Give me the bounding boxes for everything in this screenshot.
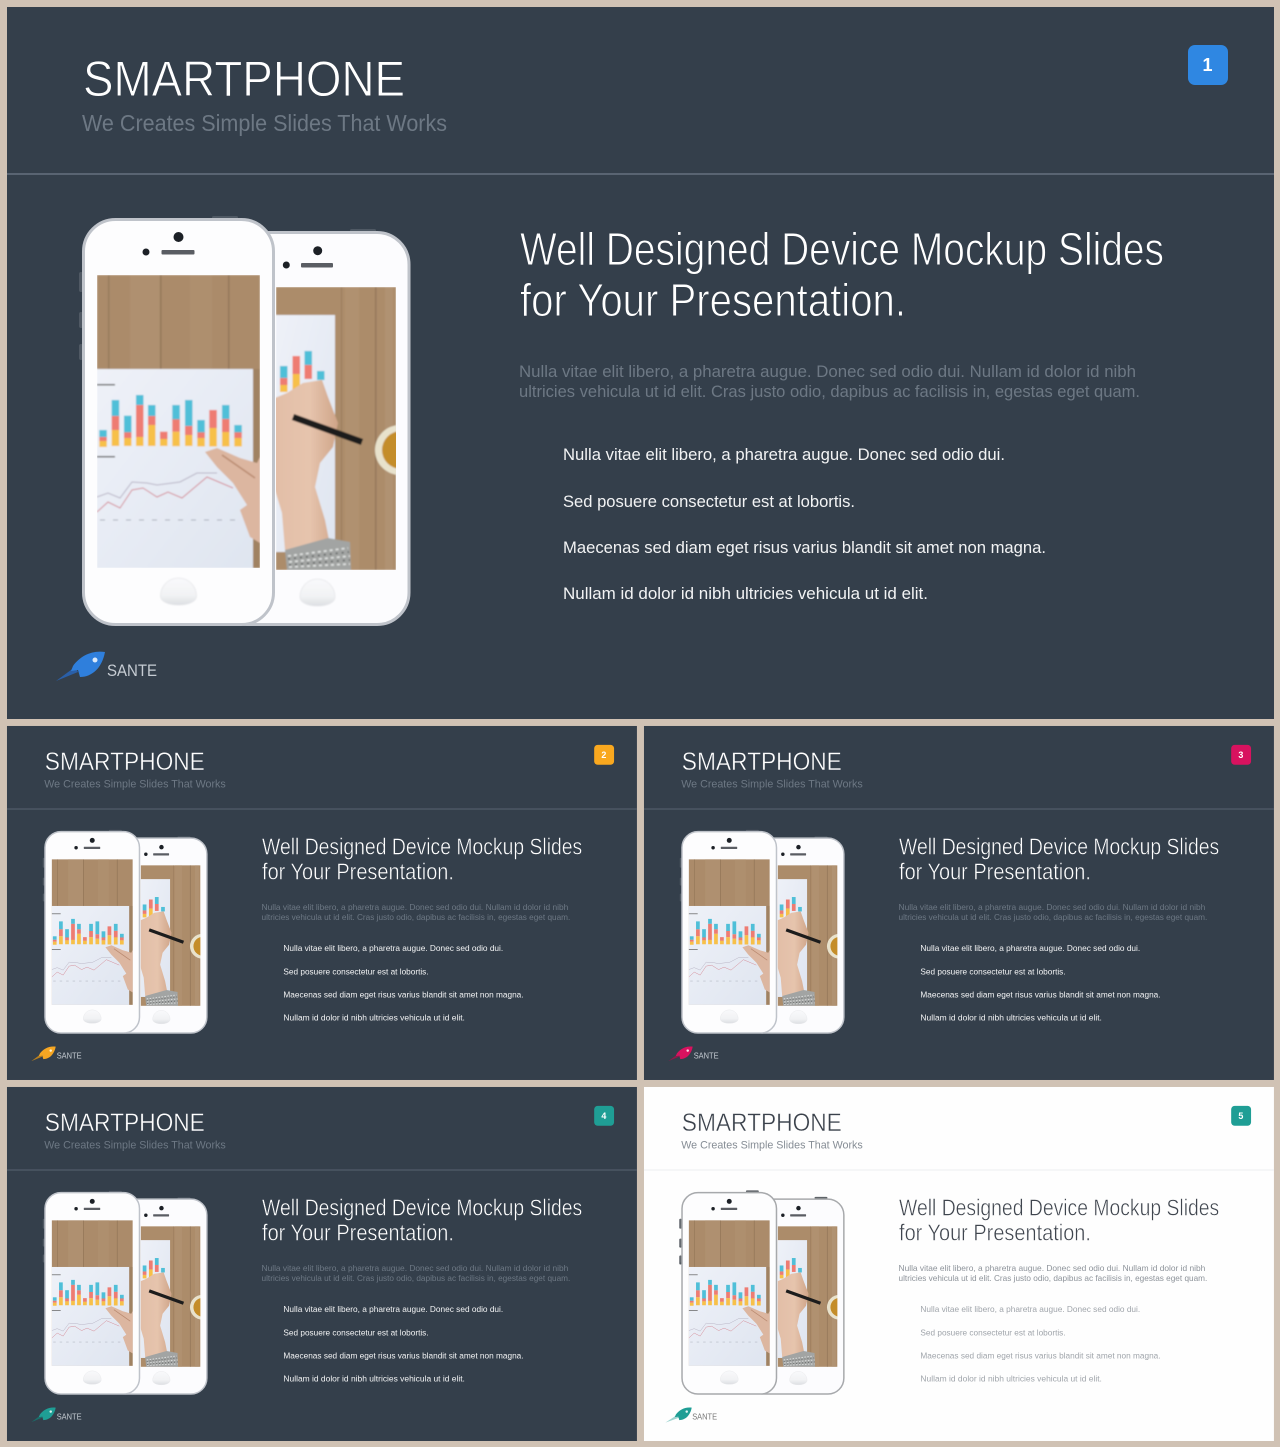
headline [262,833,582,885]
list of statements [920,1304,1161,1383]
page badge 4: 4 [601,1111,606,1121]
headline: for Your Presentation. [899,1220,1091,1246]
description paragraph: Nulla vitae elit libero, a pharetra augue. Donec sed odio dui. Nullam id dolor id nibh [519,362,1136,381]
description paragraph: Nulla vitae elit libero, a pharetra augue. Donec sed odio dui. Nullam id dolor id nibh [262,1263,569,1273]
headline [899,833,1219,885]
list of statements: Sed posuere consectetur est at lobortis. [563,492,855,511]
title: SMARTPHONE [682,1109,842,1137]
logo: rocket and SANTE: SANTE [57,1412,82,1422]
description paragraph: ultricies vehicula ut id elit. Cras justo odio, dapibus ac facilisis in, egestas eget quam. [262,1273,570,1283]
description paragraph [519,362,1140,401]
slide 1: main dark slide [7,7,1274,719]
title: SMARTPHONE [45,1109,205,1137]
list of statements: Maecenas sed diam eget risus varius blandit sit amet non magna. [920,1350,1161,1360]
page badge 2 [594,745,614,765]
logo: rocket and SANTE [665,1407,717,1423]
description paragraph: ultricies vehicula ut id elit. Cras justo odio, dapibus ac facilisis in, egestas eget quam. [899,1273,1207,1283]
subtitle: We Creates Simple Slides That Works [681,779,863,791]
page badge 3 [1231,745,1251,765]
logo: rocket and SANTE [31,1046,82,1061]
list of statements: Maecenas sed diam eget risus varius blandit sit amet non magna. [283,1350,524,1360]
subtitle: We Creates Simple Slides That Works [681,1140,863,1152]
logo: rocket and SANTE: SANTE [57,1051,82,1061]
list of statements: Nulla vitae elit libero, a pharetra augue. Donec sed odio dui. [920,943,1140,953]
headline: Well Designed Device Mockup Slides [262,833,582,859]
headline: for Your Presentation. [262,1220,454,1246]
list of statements: Maecenas sed diam eget risus varius blandit sit amet non magna. [920,989,1161,999]
page badge 2: 2 [601,750,606,760]
page badge 4 [594,1106,614,1126]
page badge 3: 3 [1238,750,1243,760]
headline [899,1194,1219,1246]
list of statements [283,1304,524,1383]
page badge 1 [1188,45,1228,85]
subtitle: We Creates Simple Slides That Works [44,779,226,791]
description paragraph: Nulla vitae elit libero, a pharetra augue. Donec sed odio dui. Nullam id dolor id nibh [899,902,1206,912]
description paragraph: ultricies vehicula ut id elit. Cras justo odio, dapibus ac facilisis in, egestas eget quam. [262,912,570,922]
description paragraph [899,902,1207,922]
slide 5: white with teal accent [644,1087,1274,1441]
description paragraph [262,902,570,922]
headline: for Your Presentation. [520,274,906,326]
slide 3: dark with crimson accent [644,726,1274,1080]
list of statements: Sed posuere consectetur est at lobortis. [920,1328,1066,1338]
description paragraph [262,1263,570,1283]
headline: Well Designed Device Mockup Slides [520,223,1164,275]
list of statements: Sed posuere consectetur est at lobortis. [920,967,1066,977]
list of statements: Nulla vitae elit libero, a pharetra augue. Donec sed odio dui. [563,445,1005,464]
page badge 5 [1231,1106,1251,1126]
slide 2: dark with orange accent [7,726,637,1080]
logo: rocket and SANTE: SANTE [692,1412,717,1422]
headline: Well Designed Device Mockup Slides [899,1194,1219,1220]
list of statements: Sed posuere consectetur est at lobortis. [283,967,429,977]
headline [520,223,1164,326]
side buttons [679,1190,827,1264]
headline: for Your Presentation. [899,859,1091,885]
phone mockups [680,1191,852,1394]
list of statements: Sed posuere consectetur est at lobortis. [283,1328,429,1338]
logo: rocket and SANTE: SANTE [107,661,157,680]
logo: rocket and SANTE [56,652,157,681]
logo: rocket and SANTE [31,1407,82,1422]
description paragraph: Nulla vitae elit libero, a pharetra augue. Donec sed odio dui. Nullam id dolor id nibh [899,1263,1206,1273]
list of statements: Nulla vitae elit libero, a pharetra augue. Donec sed odio dui. [283,943,503,953]
list of statements: Nulla vitae elit libero, a pharetra augue. Donec sed odio dui. [283,1304,503,1314]
list of statements: Nullam id dolor id nibh ultricies vehicula ut id elit. [283,1012,465,1022]
list of statements: Nulla vitae elit libero, a pharetra augue. Donec sed odio dui. [920,1304,1140,1314]
subtitle: We Creates Simple Slides That Works [82,110,447,136]
title: SMARTPHONE [682,748,842,776]
list of statements: Nullam id dolor id nibh ultricies vehicula ut id elit. [920,1012,1102,1022]
phone mockups [43,830,215,1033]
phone mockups [43,1191,215,1394]
list of statements [283,943,524,1022]
description paragraph: ultricies vehicula ut id elit. Cras justo odio, dapibus ac facilisis in, egestas eget quam. [899,912,1207,922]
description paragraph: ultricies vehicula ut id elit. Cras justo odio, dapibus ac facilisis in, egestas eget quam. [519,382,1140,401]
subtitle: We Creates Simple Slides That Works [44,1140,226,1152]
list of statements: Nullam id dolor id nibh ultricies vehicula ut id elit. [563,584,928,603]
headline: Well Designed Device Mockup Slides [262,1194,582,1220]
page badge 1: 1 [1202,55,1213,75]
headline: for Your Presentation. [262,859,454,885]
logo: rocket and SANTE: SANTE [694,1051,719,1061]
list of statements: Maecenas sed diam eget risus varius blandit sit amet non magna. [563,538,1046,557]
description paragraph: Nulla vitae elit libero, a pharetra augue. Donec sed odio dui. Nullam id dolor id nibh [262,902,569,912]
page badge 5: 5 [1238,1111,1243,1121]
list of statements [920,943,1161,1022]
logo: rocket and SANTE [668,1046,719,1061]
description paragraph [899,1263,1207,1283]
title: SMARTPHONE [83,51,405,107]
headline [262,1194,582,1246]
phone mockups [680,830,852,1033]
headline: Well Designed Device Mockup Slides [899,833,1219,859]
list of statements: Maecenas sed diam eget risus varius blandit sit amet non magna. [283,989,524,999]
phone mockups [79,216,425,624]
list of statements: Nullam id dolor id nibh ultricies vehicula ut id elit. [920,1373,1102,1383]
list of statements [563,445,1046,603]
slide 4: dark with teal accent [7,1087,637,1441]
title: SMARTPHONE [45,748,205,776]
list of statements: Nullam id dolor id nibh ultricies vehicula ut id elit. [283,1373,465,1383]
